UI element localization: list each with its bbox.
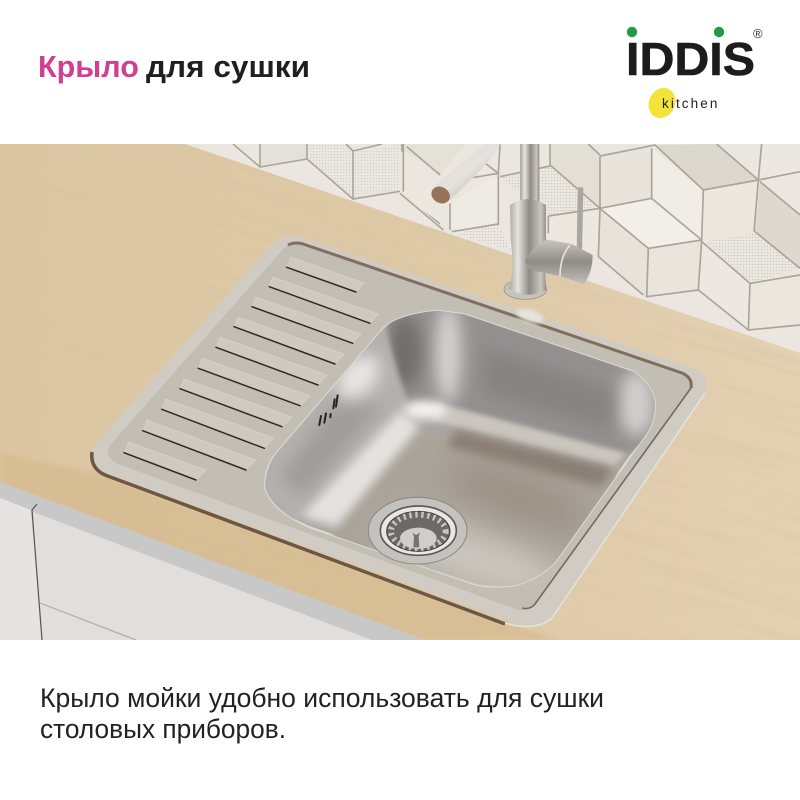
wall right light [618, 370, 655, 437]
kitchen photo [0, 144, 800, 640]
cabinet gap [32, 504, 42, 640]
overflow slots [319, 395, 338, 425]
wall to floor band [430, 403, 627, 467]
sink shadow on worktop [92, 452, 505, 624]
left wall lower shade [284, 402, 376, 493]
drain strainer [387, 511, 450, 551]
sink basin [264, 310, 656, 588]
floor warm centre [457, 465, 576, 528]
sink [92, 236, 707, 627]
cabinet left door [0, 498, 33, 640]
wall to floor dark band [447, 430, 613, 487]
logo: IDDIS kitchen [626, 26, 763, 123]
title [38, 50, 310, 84]
sink corner highlight [505, 393, 705, 627]
sink inner deck [108, 243, 690, 610]
corner highlight [403, 401, 447, 419]
faucet [428, 144, 593, 299]
tile shading [400, 144, 800, 267]
spout end [428, 183, 453, 207]
logo yellow blob [644, 83, 680, 123]
counter front edge [0, 452, 560, 640]
title: для сушки [146, 50, 310, 84]
sink outer rim [92, 236, 707, 627]
handle ring [560, 245, 570, 276]
grout lines [400, 144, 800, 330]
drain cap [400, 528, 437, 549]
wood grain [0, 144, 800, 640]
logo green dot left [627, 27, 637, 37]
strainer slots [391, 515, 446, 548]
cabinet door [33, 512, 372, 640]
tiled backsplash [185, 144, 800, 353]
wall dark stripe [388, 315, 422, 388]
drain flange [368, 497, 467, 564]
rim groove top [288, 243, 691, 388]
left wall bright patch [332, 349, 386, 406]
title: Крыло [38, 50, 139, 84]
cabinet fronts [0, 482, 420, 640]
drain stem [412, 533, 420, 547]
dotted tiles [455, 166, 800, 283]
faucet spout [433, 144, 500, 200]
back wall [383, 307, 663, 457]
body text: столовых приборов. [40, 714, 286, 744]
drain [368, 497, 467, 564]
basin lip [265, 311, 655, 587]
faucet body [508, 199, 547, 295]
registered mark: ® [753, 26, 763, 41]
wall middle shade [484, 353, 620, 424]
rib shadows [124, 267, 370, 480]
handle [525, 239, 593, 284]
wooden countertop [0, 144, 800, 640]
wall light stripe [435, 303, 462, 403]
diagonal highlight [300, 410, 420, 527]
drain ring [380, 506, 456, 555]
drainer ribs [124, 257, 378, 480]
rim groove bottom [522, 388, 691, 608]
faucet base [504, 279, 547, 299]
left wall [260, 323, 407, 523]
lever [577, 187, 583, 255]
cabinet shadow band [0, 482, 420, 640]
floor lighter corner [418, 518, 558, 586]
backsplash base [185, 144, 800, 353]
left tiles [233, 144, 440, 224]
drawer gap [40, 603, 136, 640]
body text [40, 683, 604, 744]
logo wordmark: IDDIS [626, 33, 755, 85]
deck reflection under faucet [515, 306, 545, 326]
logo kitchen word: kitchen [662, 96, 719, 111]
body text: Крыло мойки удобно использовать для сушки [40, 683, 604, 713]
basin floor [330, 472, 618, 586]
logo green dot right [714, 27, 724, 37]
faucet riser [520, 144, 539, 207]
